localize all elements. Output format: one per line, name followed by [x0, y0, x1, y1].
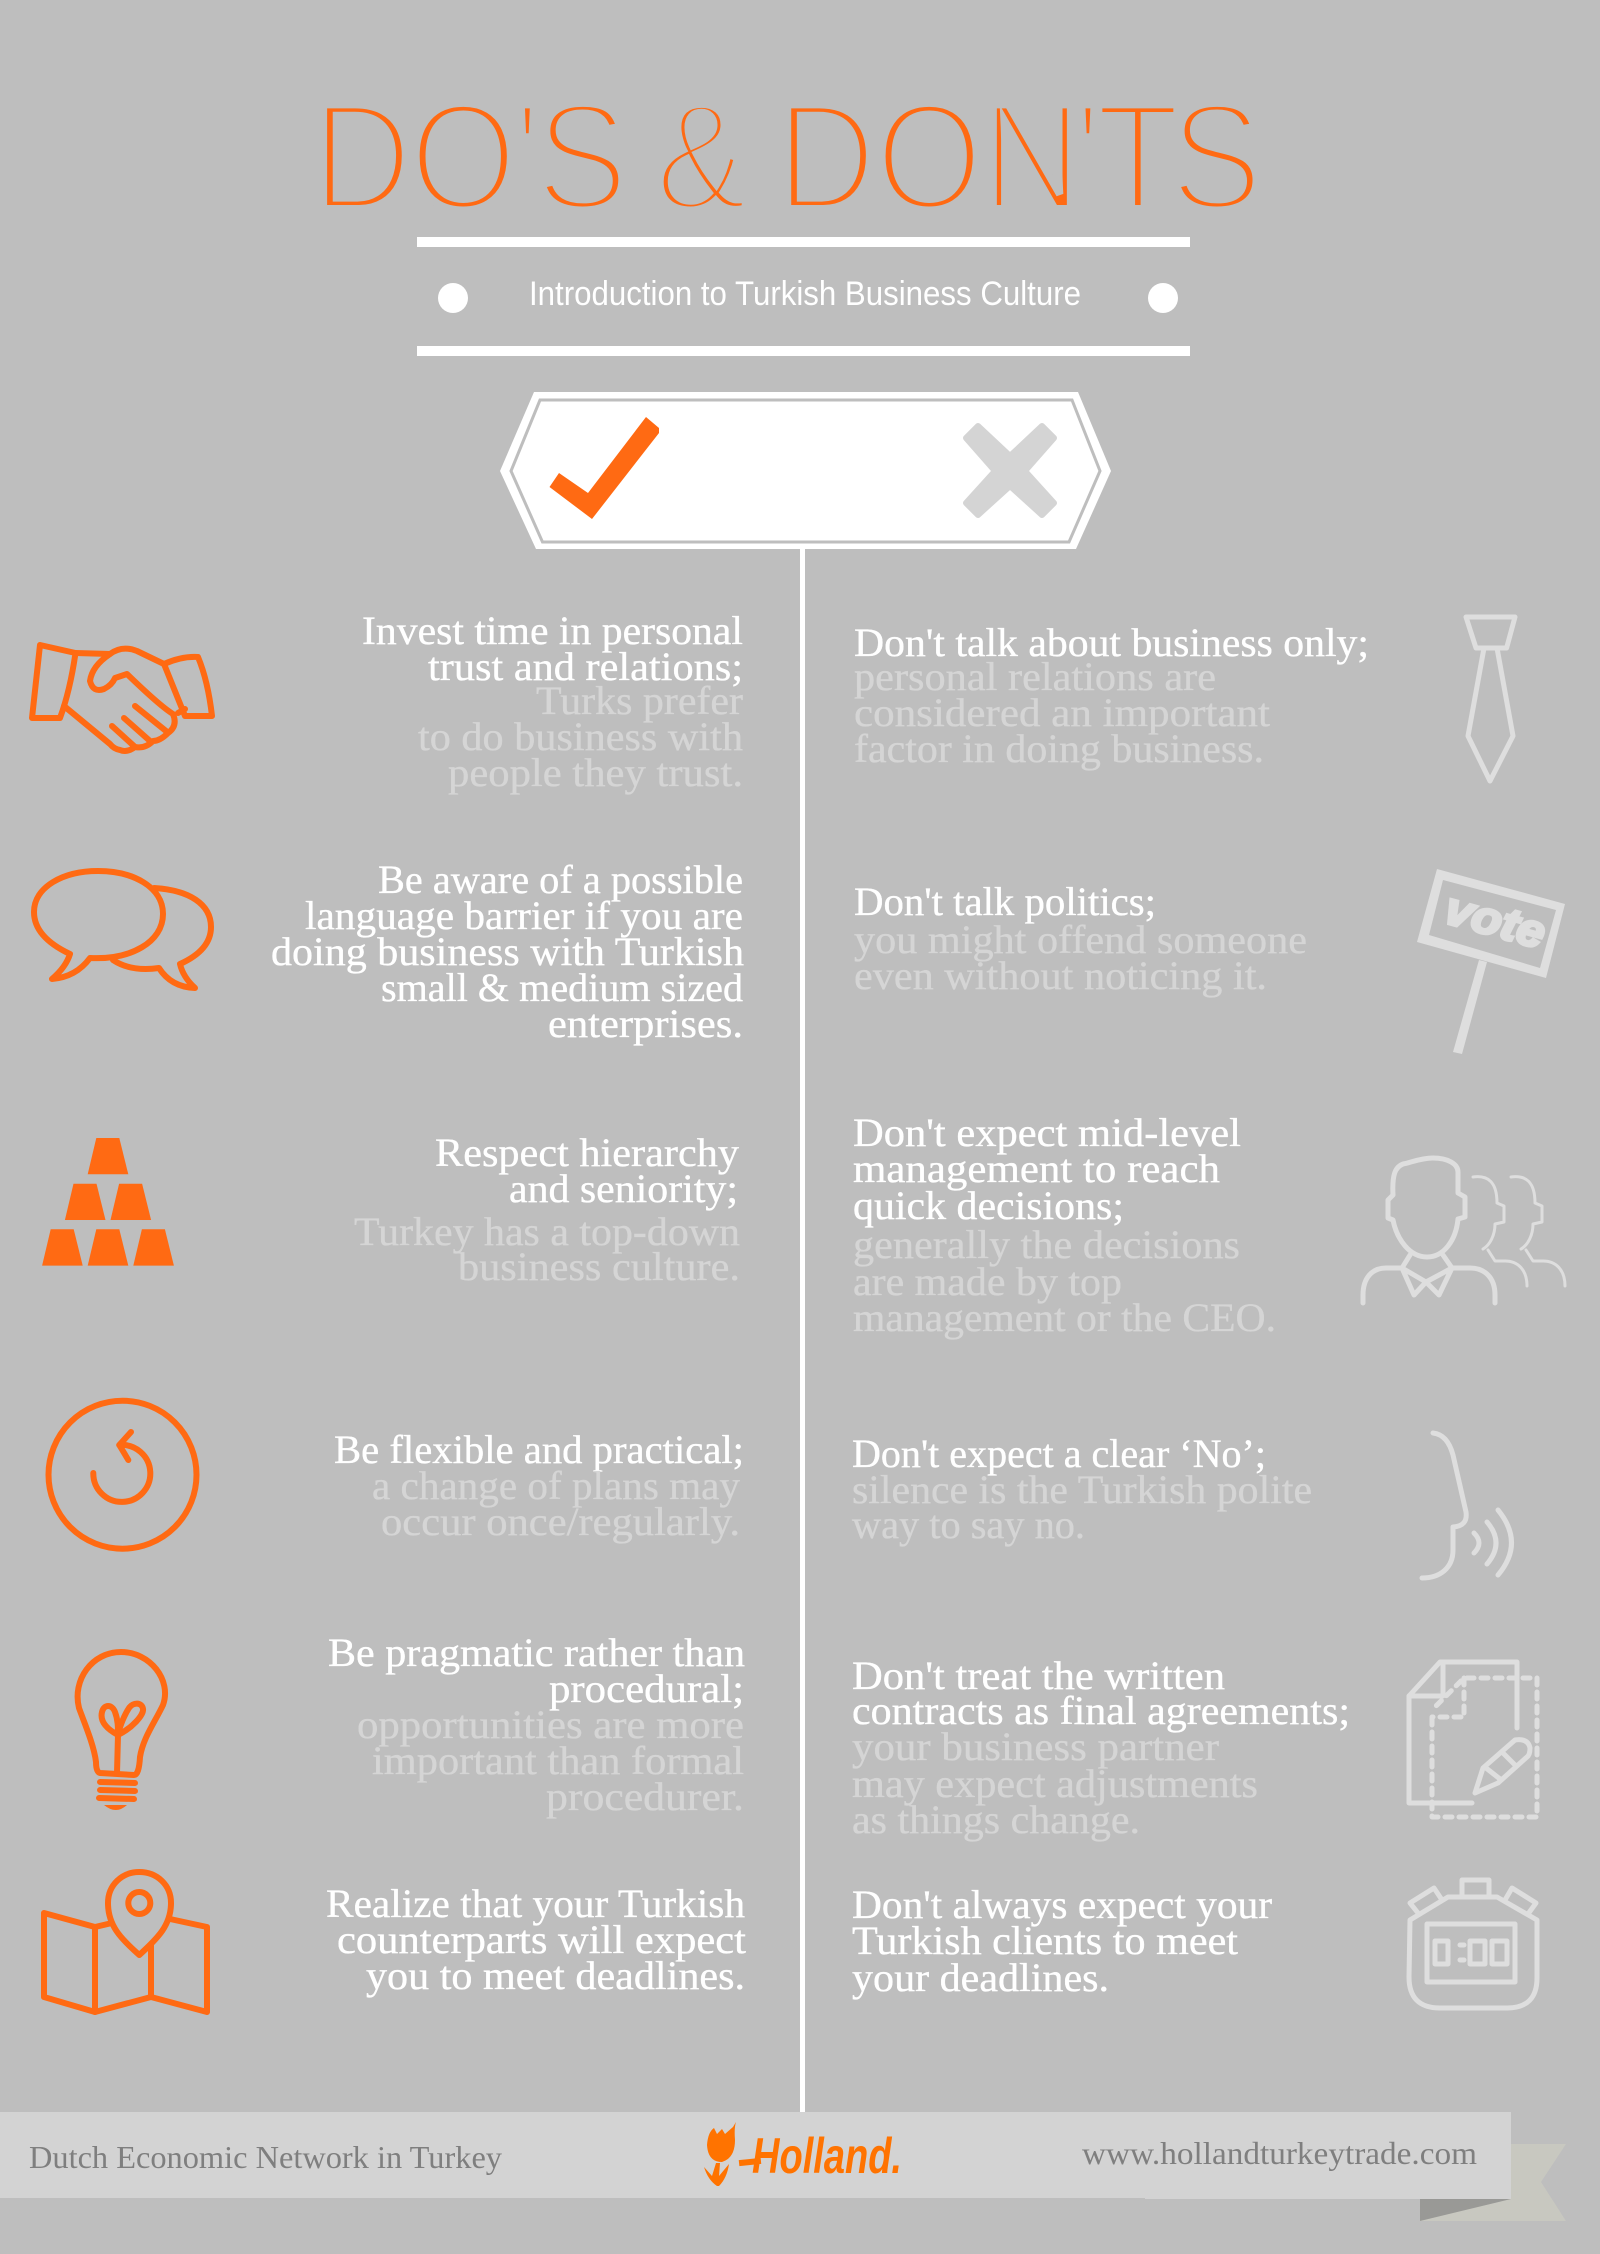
- icon: pyramid of blocks: [42, 1138, 174, 1266]
- don't 2 text: [854, 879, 1307, 998]
- don't 6 text: Turkish clients to meet: [852, 1918, 1238, 1963]
- do 5 text: opportunities are more: [357, 1702, 744, 1747]
- don't 2 text: Don't talk politics;: [854, 879, 1156, 924]
- don't 5 text: contracts as final agreements;: [852, 1688, 1350, 1733]
- do 6 text: [326, 1881, 746, 1998]
- don't 6 text: Don't always expect your: [852, 1882, 1272, 1927]
- ribbon band: [0, 2112, 1511, 2199]
- don't 2 text: even without noticing it.: [854, 953, 1267, 998]
- don't 5 text: may expect adjustments: [852, 1761, 1258, 1806]
- logo: Holland tulip: Holland.: [752, 2128, 902, 2184]
- left column: do's text: [271, 608, 746, 1998]
- do 6 text: Realize that your Turkish: [326, 1881, 745, 1926]
- do 5 text: Be pragmatic rather than: [328, 1630, 745, 1675]
- do 3 text: business culture.: [458, 1244, 740, 1289]
- subtitle banner: [417, 237, 1190, 356]
- do 4 text: a change of plans may: [372, 1463, 740, 1508]
- do 3 text: Respect hierarchy: [435, 1130, 739, 1175]
- do 4 text: occur once/regularly.: [381, 1499, 740, 1544]
- icon: check mark: [550, 417, 659, 519]
- do 4 text: Be flexible and practical;: [334, 1427, 744, 1472]
- logo: Holland tulip: [704, 2122, 902, 2186]
- subtitle banner: Introduction to Turkish Business Culture: [529, 275, 1081, 313]
- don't 5 text: [852, 1653, 1350, 1842]
- don't 5 text: as things change.: [852, 1797, 1140, 1842]
- ribbon fold: [1420, 2199, 1511, 2221]
- do 2 text: language barrier if you are: [305, 893, 743, 938]
- don't 1 text: personal relations are: [854, 654, 1216, 699]
- don't 5 text: Don't treat the written: [852, 1653, 1225, 1698]
- icon: stopwatch: [1409, 1880, 1537, 2008]
- do 6 text: you to meet deadlines.: [366, 1953, 745, 1998]
- ribbon tail: [1420, 2144, 1566, 2221]
- don't 1 text: factor in doing business.: [854, 726, 1264, 771]
- don't 3 text: Don't expect mid-level: [853, 1110, 1241, 1155]
- don't 6 text: your deadlines.: [852, 1955, 1109, 2000]
- do 5 text: procedural;: [549, 1666, 744, 1711]
- do 1 text: people they trust.: [448, 750, 743, 795]
- icon: vote sign: [1417, 869, 1565, 1054]
- do 1 text: to do business with: [418, 714, 743, 759]
- do 2 text: enterprises.: [548, 1001, 743, 1046]
- icon: circular arrow: [48, 1401, 196, 1549]
- don't 3 text: are made by top: [853, 1259, 1122, 1304]
- don't 2 text: you might offend someone: [854, 917, 1307, 962]
- don't 1 text: Don't talk about business only;: [854, 620, 1369, 665]
- don't 3 text: generally the decisions: [853, 1222, 1240, 1267]
- don't 4 text: way to say no.: [852, 1502, 1085, 1547]
- icon: face speaking: [1422, 1433, 1512, 1578]
- do 5 text: [328, 1630, 745, 1819]
- don't 4 text: silence is the Turkish polite: [852, 1467, 1312, 1512]
- don't 4 text: [852, 1431, 1312, 1547]
- don't 1 text: [854, 620, 1369, 771]
- do 3 text: Turkey has a top-down: [354, 1209, 740, 1254]
- do 1 text: Invest time in personal: [362, 608, 743, 653]
- do 5 text: procedurer.: [546, 1774, 744, 1819]
- right column: don'ts text: [852, 620, 1369, 2000]
- icon: light bulb: [78, 1652, 165, 1810]
- icon: cross: [966, 426, 1054, 515]
- title: DO'S & DON'TS: [312, 71, 1263, 241]
- sign with check and cross: [500, 392, 1111, 549]
- do 3 text: [354, 1130, 740, 1289]
- footer left text: Dutch Economic Network in Turkey: [29, 2139, 502, 2175]
- don't 3 text: management or the CEO.: [853, 1295, 1276, 1340]
- do 2 text: doing business with Turkish: [271, 929, 744, 974]
- icon: vote sign: vote: [1439, 881, 1551, 959]
- don't 6 text: [852, 1882, 1272, 2000]
- icon: speech bubbles: [34, 871, 211, 988]
- do 5 text: important than formal: [372, 1738, 744, 1783]
- do 1 text: Turks prefer: [536, 678, 743, 723]
- icon: contract with pencil: [1409, 1662, 1537, 1817]
- icon: group of managers: [1363, 1158, 1565, 1303]
- icon: handshake: [32, 645, 212, 751]
- icon: map with pin: [44, 1872, 207, 2012]
- don't 4 text: Don't expect a clear ‘No’;: [852, 1431, 1266, 1476]
- do 4 text: [334, 1427, 744, 1544]
- don't 5 text: your business partner: [852, 1724, 1219, 1769]
- do 3 text: and seniority;: [509, 1166, 738, 1211]
- footer website text: www.hollandturkeytrade.com: [1082, 2135, 1477, 2171]
- do 2 text: [271, 857, 744, 1046]
- don't 3 text: [853, 1110, 1276, 1340]
- don't 3 text: management to reach: [853, 1146, 1220, 1191]
- icon: necktie: [1466, 617, 1515, 781]
- don't 3 text: quick decisions;: [853, 1183, 1124, 1228]
- do 1 text: [362, 608, 743, 795]
- don't 1 text: considered an important: [854, 690, 1270, 735]
- do 6 text: counterparts will expect: [337, 1917, 746, 1962]
- center divider line: [800, 549, 805, 2113]
- footer ribbon: [0, 2112, 1566, 2221]
- do 2 text: Be aware of a possible: [378, 857, 743, 902]
- do 2 text: small & medium sized: [381, 965, 743, 1010]
- do 1 text: trust and relations;: [428, 644, 743, 689]
